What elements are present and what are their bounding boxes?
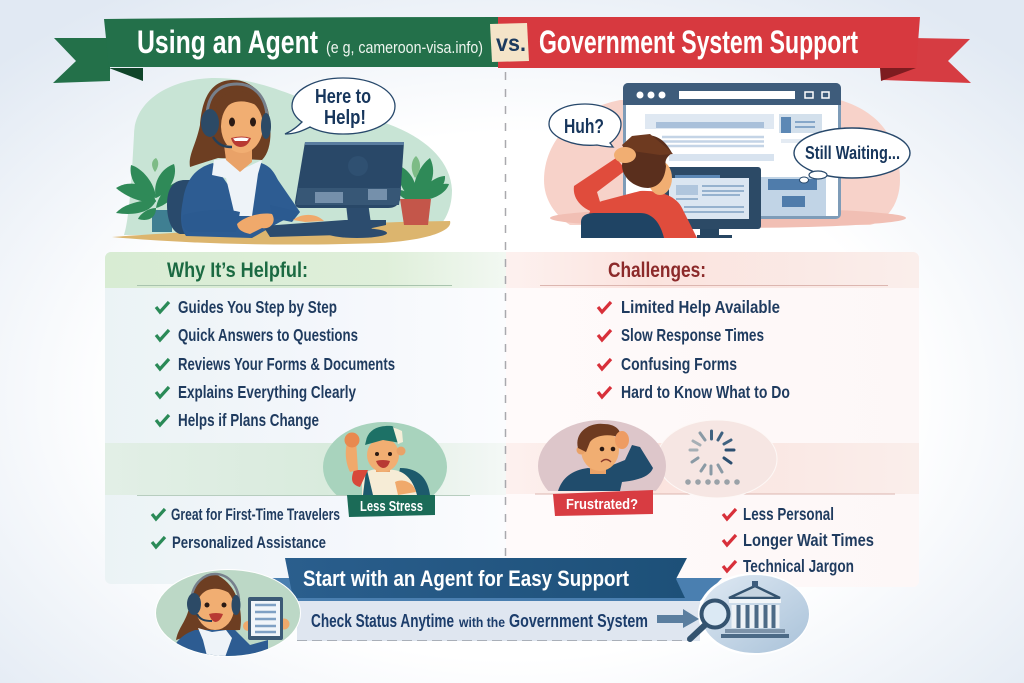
checklist: challenges: Hard to Know What to Do — [621, 382, 790, 402]
agent shirt — [212, 158, 262, 216]
checklist: more challenges: Less Personal — [743, 504, 834, 524]
chair — [167, 180, 195, 234]
agent jacket — [181, 162, 300, 238]
main ribbon — [285, 558, 687, 598]
lower band: challenges — [506, 443, 919, 494]
header band: challenges — [506, 252, 919, 288]
plant: left — [116, 158, 184, 232]
banner: red side — [498, 17, 971, 83]
speech bubble: still waiting: Still Waiting... — [805, 143, 900, 163]
panel: why it's helpful — [105, 252, 506, 584]
main ribbon: Start with an Agent for Easy Support — [303, 566, 630, 591]
frustrated person — [574, 134, 697, 238]
vs badge — [490, 23, 529, 62]
panel: challenges — [506, 252, 919, 587]
checklist: helpful: Quick Answers to Questions — [178, 325, 358, 345]
plant pot — [400, 199, 431, 225]
checklist: helpful: Explains Everything Clearly — [178, 382, 356, 402]
banner: green side: Using an Agent — [137, 24, 318, 60]
chair: user — [581, 213, 664, 238]
speech bubble: here to help: Help! — [324, 107, 366, 129]
speech bubble: huh: Huh? — [564, 116, 604, 138]
illustration: frustrated user at government site — [544, 83, 910, 238]
vs badge: vs. — [496, 30, 526, 56]
circle: government building search — [690, 573, 810, 655]
spinner — [690, 431, 734, 474]
checklist: more challenges: Technical Jargon — [743, 556, 854, 576]
header band: helpful — [105, 252, 506, 288]
speech bubble: huh — [549, 104, 621, 147]
checklist: helpful: Helps if Plans Change — [178, 410, 319, 430]
tag: frustrated: Frustrated? — [566, 496, 638, 513]
agent arms and hands — [182, 205, 324, 234]
badge: loading spinner — [657, 420, 777, 498]
status strip: Government System — [509, 611, 648, 631]
headset — [201, 84, 271, 147]
status strip — [297, 601, 700, 641]
agent eyes and mouth — [229, 118, 256, 147]
traveler character — [344, 426, 430, 495]
tag: less stress: Less Stress — [360, 498, 423, 515]
badge: frustrated — [538, 420, 666, 516]
checklist: helpful — [156, 297, 395, 430]
background blob: pink — [544, 100, 900, 225]
banner: green side — [53, 17, 500, 83]
lower band: helpful — [105, 443, 506, 495]
keyboard — [263, 220, 386, 237]
checklist: helpful: Guides You Step by Step — [178, 297, 337, 317]
monitor — [295, 142, 404, 238]
checklist: extra benefits: Great for First-Time Travelers — [171, 506, 340, 524]
back ribbon — [240, 578, 722, 601]
status strip: Check Status Anytime — [311, 611, 454, 631]
speech bubble: here to help: Here to — [315, 86, 371, 108]
heading: challenges: Challenges: — [608, 259, 706, 282]
magnifier — [690, 600, 728, 639]
loading dots — [685, 479, 740, 485]
agent hair — [190, 80, 270, 167]
government building — [721, 581, 789, 638]
checklist: challenges: Slow Response Times — [621, 325, 764, 345]
checklist: challenges — [598, 297, 790, 402]
background blob: green — [124, 78, 452, 235]
agent neck and face — [224, 145, 252, 172]
speech bubble: here to help — [285, 78, 395, 134]
banner: red side: Government System Support — [539, 24, 858, 60]
checklist: extra benefits: Personalized Assistance — [172, 534, 326, 552]
desk — [112, 221, 450, 245]
checklist: challenges: Confusing Forms — [621, 354, 737, 374]
illustration: helpful agent at desk — [112, 78, 452, 245]
checklist: helpful: Reviews Your Forms & Documents — [178, 354, 395, 374]
browser window — [623, 83, 841, 219]
plant: right — [397, 156, 449, 201]
badge: less stress traveler — [323, 422, 447, 517]
checklist: extra benefits — [152, 506, 340, 552]
heading: why it's helpful: Why It’s Helpful: — [167, 259, 308, 282]
ground shadow — [550, 208, 906, 228]
banner: green side: (e g, cameroon-visa.info) — [326, 38, 483, 57]
checklist: challenges: Limited Help Available — [621, 297, 780, 317]
circle: agent with clipboard — [155, 569, 301, 660]
arrow to building — [657, 609, 699, 628]
speech bubble: still waiting — [794, 128, 910, 183]
checklist: more challenges: Longer Wait Times — [743, 530, 874, 550]
frustrated character — [558, 424, 653, 491]
callout: bottom recommendation — [155, 558, 810, 660]
centre dashed divider — [504, 72, 506, 556]
checklist: more challenges — [723, 504, 874, 576]
title banner — [53, 17, 971, 83]
status strip: with the — [458, 614, 505, 630]
small monitor — [662, 167, 761, 238]
